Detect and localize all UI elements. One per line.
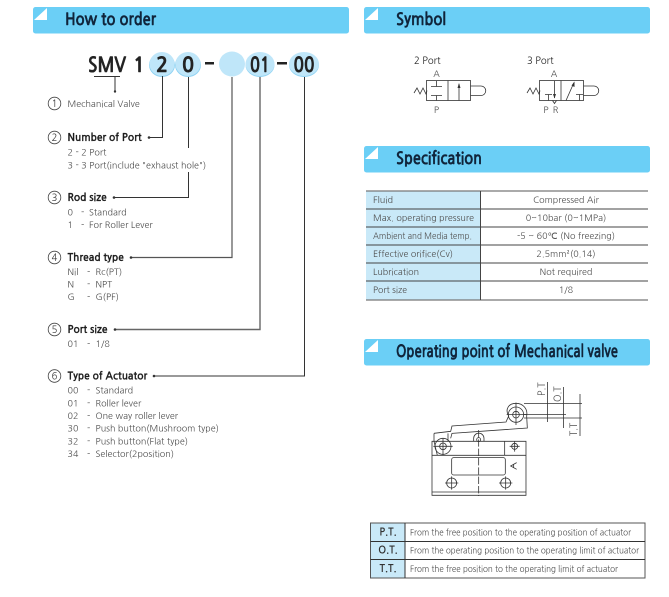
symbol: 2 port valve: 2 Port	[414, 57, 441, 66]
value text	[517, 196, 615, 295]
label text: Effective orifice(Cv)	[373, 249, 453, 259]
item 2: number of port	[48, 131, 206, 170]
code text: 2	[156, 55, 168, 75]
item 3: rod size: -	[81, 208, 84, 218]
item 2: number of port: 2	[52, 134, 57, 143]
item 6: type of actuator: -	[87, 412, 90, 421]
body	[432, 441, 526, 495]
item 2: number of port: 3 - 3 Port(include "exhaust hole")	[68, 160, 206, 170]
item 6: type of actuator: 6	[52, 372, 58, 382]
header: specification	[364, 146, 650, 172]
item 5: port size	[48, 323, 110, 349]
item 6: type of actuator: One way roller lever	[96, 412, 179, 421]
item 6: type of actuator: Standard	[96, 386, 133, 396]
header: specification: Specification	[396, 150, 482, 167]
code text: 1	[133, 55, 145, 75]
item 6: type of actuator: 00	[68, 386, 78, 396]
item 6: type of actuator: 01	[68, 400, 78, 408]
item 4: thread type: 4	[52, 254, 58, 263]
definition text: From the free position to the operating position of actuator	[410, 528, 632, 538]
symbol: 3 port valve: 3 Port	[527, 57, 554, 66]
lever	[434, 403, 527, 438]
item 3: rod size: Rod size	[68, 192, 107, 203]
item 4: thread type: -	[87, 293, 90, 302]
label column	[366, 191, 480, 300]
order code	[88, 52, 319, 77]
value text: 0~10bar (0~1MPa)	[526, 213, 606, 223]
header: operating point: Operating point of Mechanical valve	[396, 343, 618, 360]
item 6: type of actuator: Selector(2position)	[96, 449, 174, 459]
symbol: 3 port valve: A	[551, 70, 558, 79]
table rules	[366, 191, 648, 300]
header: symbol: Symbol	[396, 11, 446, 28]
item 3: rod size: For Roller Lever	[89, 221, 153, 230]
item 3: rod size	[48, 191, 153, 230]
item 6: type of actuator: 02	[68, 412, 78, 421]
code text: 0	[182, 55, 194, 75]
item 3: rod size: 0	[68, 208, 73, 218]
item 3: rod size: 3	[52, 194, 57, 203]
item 6: type of actuator: -	[87, 386, 90, 396]
definition labels: T.T.	[380, 564, 396, 574]
code text: SMV	[88, 55, 127, 75]
symbol: 3 port valve: P	[543, 106, 549, 115]
header: operating point	[364, 339, 650, 366]
definition labels: P.T.	[379, 528, 397, 538]
item 4: thread type: -	[87, 280, 90, 290]
dimension labels	[538, 382, 579, 436]
item 3: rod size: -	[81, 221, 84, 230]
label text: Max. operating pressure	[373, 214, 474, 223]
item 4: thread type: -	[87, 268, 90, 277]
item 2: number of port: 2 - 2 Port	[68, 148, 107, 158]
value text: Compressed Air	[533, 196, 600, 205]
item 6: type of actuator	[48, 370, 219, 459]
item 6: type of actuator: Type of Actuator	[68, 370, 148, 382]
definition labels	[378, 528, 398, 574]
item 6: type of actuator: 34	[68, 450, 79, 459]
item 5: port size: 01	[68, 340, 78, 349]
dimension labels: P.T	[538, 382, 547, 396]
definition text: From the operating position to the operating limit of actuator	[410, 546, 640, 556]
code text: 01	[250, 55, 270, 75]
item 5: port size: Port size	[68, 324, 108, 335]
item 6: type of actuator: -	[87, 438, 90, 446]
code bubbles	[149, 52, 319, 77]
symbol: 3 port valve: R	[553, 106, 559, 115]
item 1: mechanical valve	[48, 97, 140, 110]
item 2: number of port: Number of Port	[68, 132, 142, 143]
item 4: thread type: G	[68, 293, 75, 302]
item 5: port size: 1/8	[96, 340, 110, 349]
label text: Lubrication	[373, 268, 419, 277]
item 6: type of actuator: Push button(Flat type)	[96, 436, 188, 446]
value text: 1/8	[559, 286, 573, 295]
symbol: 3 port valve	[527, 57, 599, 115]
item 6: type of actuator: 32	[68, 438, 78, 446]
symbol: 2 port valve: P	[434, 106, 439, 115]
item 6: type of actuator: Push button(Mushroom type)	[96, 424, 219, 434]
label text: Fluid	[373, 196, 393, 205]
item 1: mechanical valve: 1	[52, 100, 57, 109]
definitions table	[370, 523, 645, 578]
definition text: From the free position to the operating limit of actuator	[410, 565, 619, 574]
symbol: 2 port valve	[414, 57, 486, 115]
label text: Port size	[373, 286, 407, 295]
dimension lines	[524, 382, 582, 436]
roller	[440, 443, 446, 450]
item 5: port size: 5	[52, 326, 58, 335]
connector lines	[94, 76, 304, 377]
item 6: type of actuator: -	[87, 400, 90, 408]
item 3: rod size: 1	[68, 221, 73, 230]
dimension labels: O.T	[554, 386, 563, 402]
item 4: thread type	[48, 251, 124, 302]
item 5: port size: -	[87, 340, 90, 349]
label text: Ambient and Media temp.	[373, 232, 472, 241]
item 4: thread type: NPT	[96, 280, 112, 290]
holes	[512, 443, 518, 449]
code text	[88, 55, 314, 75]
item 4: thread type: Rc(PT)	[96, 267, 122, 277]
item 6: type of actuator: -	[87, 424, 90, 434]
value text: 2.5mm²(0.14)	[536, 249, 596, 259]
item 4: thread type: N	[68, 280, 74, 290]
value text: -5 ~ 60℃ (No freezing)	[517, 231, 615, 241]
item 4: thread type: Nil	[68, 268, 78, 277]
item 4: thread type: G(PF)	[96, 292, 119, 302]
item 6: type of actuator: 30	[68, 424, 78, 434]
item 6: type of actuator: Roller lever	[96, 400, 142, 408]
definition text	[410, 528, 640, 574]
header: symbol	[364, 7, 650, 34]
definition labels: O.T.	[378, 546, 398, 556]
button	[474, 433, 484, 441]
item 1: mechanical valve: Mechanical Valve	[68, 100, 140, 109]
code text: 00	[294, 55, 314, 75]
item 3: rod size: Standard	[89, 208, 127, 218]
value text: Not required	[540, 268, 592, 277]
header: how to order	[33, 7, 349, 34]
operating point drawing	[432, 403, 527, 496]
symbol: 2 port valve: A	[433, 70, 440, 79]
label text	[373, 196, 474, 295]
item 6: type of actuator: -	[87, 450, 90, 459]
item 4: thread type: Thread type	[68, 252, 124, 263]
dimension labels: T.T	[570, 422, 579, 436]
code dashes	[205, 62, 287, 64]
specification table	[366, 191, 648, 300]
header: how to order: How to order	[65, 11, 157, 28]
